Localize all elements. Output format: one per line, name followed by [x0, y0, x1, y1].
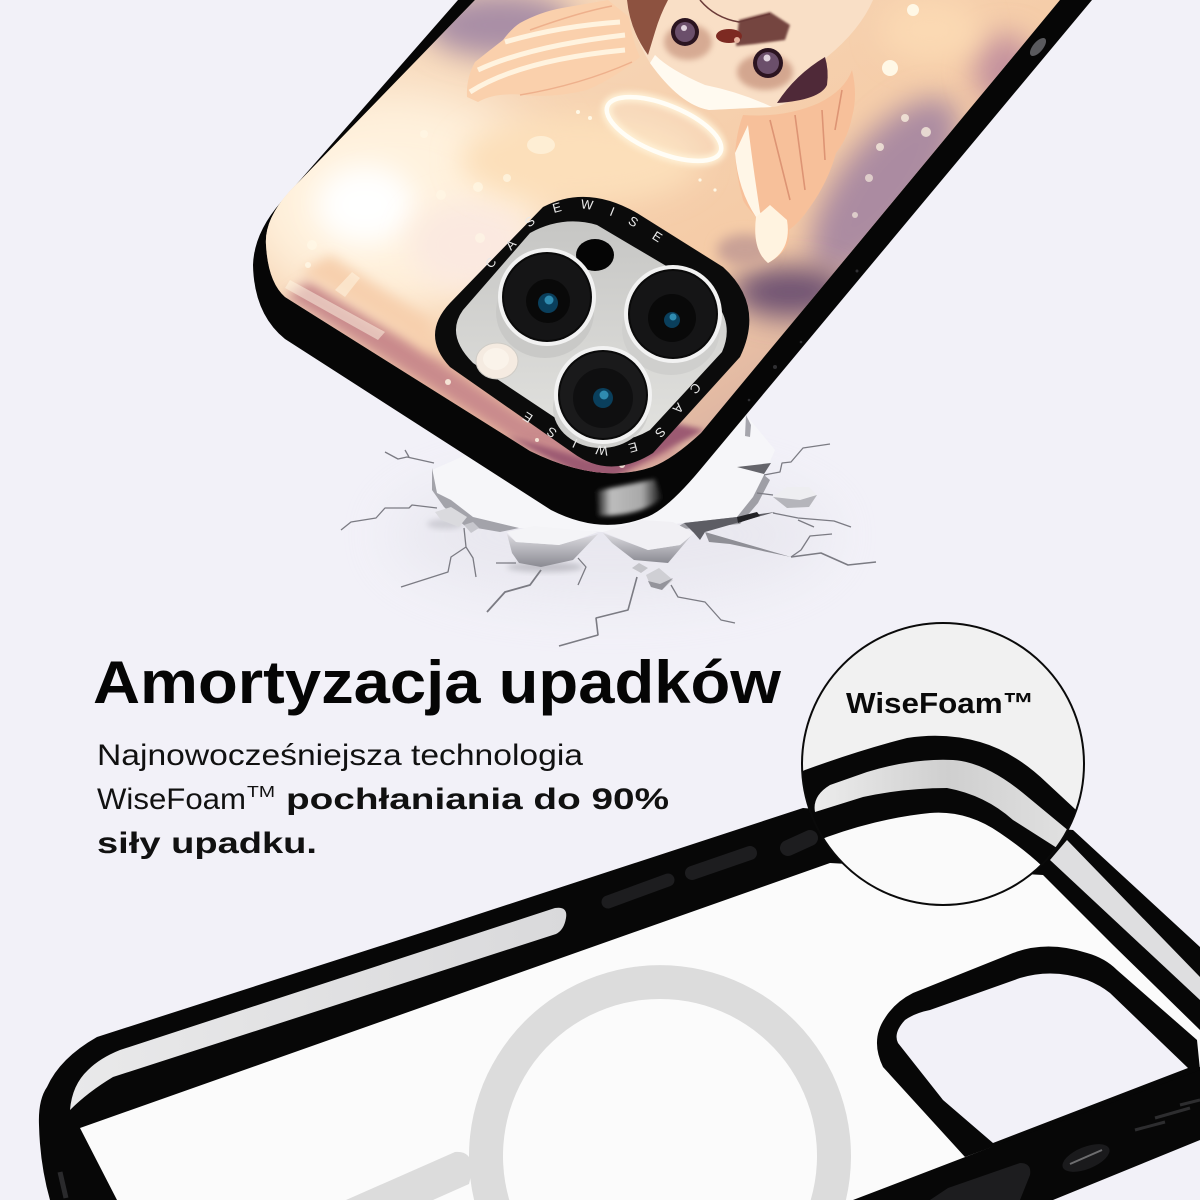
right wing	[735, 70, 855, 263]
foam gap right	[1050, 840, 1200, 1000]
bokeh sparkles	[285, 4, 931, 468]
dog muzzle patch	[736, 12, 790, 46]
left wing	[467, 0, 640, 102]
CASEWISE lower ring text: W	[594, 442, 609, 459]
camera plateau	[456, 221, 727, 441]
CASEWISE upper ring text: E	[650, 228, 665, 245]
flash	[476, 343, 518, 379]
camera cutout frame	[877, 946, 1200, 1157]
right wedge shard	[705, 532, 791, 557]
microphone hole	[576, 239, 614, 271]
foam gap left	[70, 908, 566, 1110]
case interior	[80, 863, 1200, 1200]
CASEWISE lower ring text	[520, 380, 704, 459]
MagSafe ring	[469, 965, 851, 1200]
phone case body	[253, 0, 1092, 525]
WiseFoam label: WiseFoam™	[846, 688, 1034, 720]
CASEWISE lower ring text: E	[520, 409, 535, 426]
dog eyes and nose	[671, 18, 783, 78]
CASEWISE upper ring text: I	[608, 204, 617, 219]
body text: siły upadku.	[97, 827, 317, 860]
side button cutouts	[608, 838, 810, 902]
CASEWISE upper ring text: E	[551, 199, 563, 216]
case edge details	[748, 270, 858, 401]
camera cutout opening	[897, 973, 1188, 1143]
magnified case corner	[803, 736, 1076, 904]
CASEWISE lower ring text: C	[687, 380, 704, 397]
CASEWISE upper ring text: A	[502, 236, 519, 253]
camera lens 3	[553, 346, 652, 448]
MagSafe alignment bar	[346, 1152, 472, 1200]
camera lens 1	[496, 248, 596, 358]
rubble chunks	[427, 487, 817, 590]
CASEWISE lower ring text: I	[570, 436, 580, 451]
body text: WiseFoam	[97, 783, 246, 816]
body text	[97, 739, 669, 860]
CASEWISE lower ring text: A	[670, 400, 687, 417]
body text: Najnowocześniejsza technologia	[97, 739, 583, 772]
CASEWISE upper ring text: W	[580, 196, 595, 213]
WiseFoam magnifier circle outline	[802, 623, 1084, 905]
phone screen artwork: angel dog	[266, 0, 1060, 474]
CASEWISE lower ring text: E	[627, 439, 639, 456]
CASEWISE lower ring text: S	[652, 424, 669, 441]
CASEWISE upper ring text: S	[522, 213, 538, 230]
halo	[600, 90, 728, 168]
case outer black frame	[39, 808, 1200, 1200]
body text: TM	[247, 784, 275, 801]
cracked wall impact	[341, 415, 876, 646]
lower case slots and port	[60, 1100, 1200, 1200]
CASEWISE upper ring text: C	[482, 254, 499, 271]
CASEWISE upper ring text: S	[626, 213, 641, 230]
camera lens 2	[622, 265, 722, 375]
CASEWISE lower ring text: S	[544, 424, 559, 441]
crack lines	[341, 444, 876, 646]
side button on phone edge	[1027, 35, 1049, 59]
bottom transparent case	[39, 808, 1200, 1200]
dog ear	[777, 57, 828, 103]
title: Amortyzacja upadków	[93, 649, 781, 716]
body text: pochłaniania do 90%	[286, 783, 669, 816]
CASEWISE upper ring text	[482, 196, 665, 271]
dog head	[627, 0, 873, 110]
camera bumper ring	[435, 197, 749, 467]
glossy highlight on case corner	[596, 479, 662, 516]
WiseFoam magnifier circle fill	[802, 623, 1084, 905]
